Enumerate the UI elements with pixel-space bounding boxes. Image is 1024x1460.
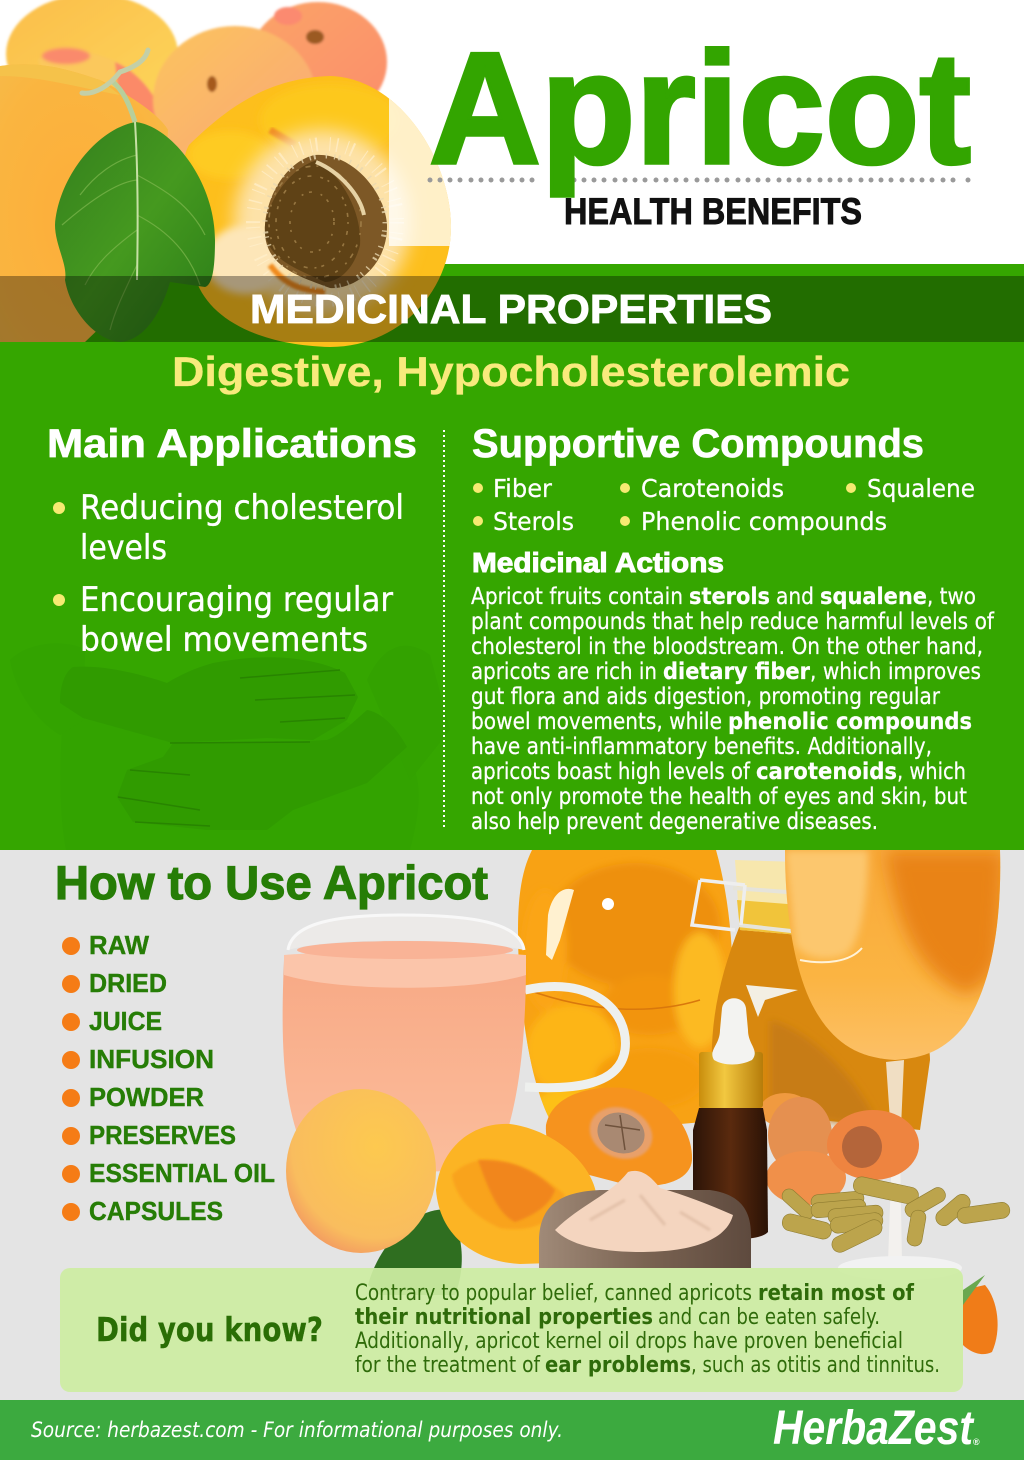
image: leaf beneath whole apricot: [368, 1210, 462, 1295]
text block: medicinal actions: apricots boast high levels of: [471, 759, 751, 785]
vertical dotted divider: [443, 430, 445, 830]
panel: how to use background: [0, 850, 1024, 1400]
image: whole apricot: [286, 1089, 436, 1253]
list: supportive compounds: Squalene: [867, 474, 975, 503]
text block: medicinal actions: , which: [897, 759, 966, 785]
text block: medicinal actions: , two: [927, 584, 976, 610]
list: main applications: Reducing cholesterol: [80, 488, 404, 528]
list: supportive compounds: Carotenoids: [641, 474, 784, 503]
panel: medicinal properties green background: [0, 264, 1024, 850]
image: hands on abdomen silhouette: [10, 643, 450, 850]
list: main applications: levels: [80, 528, 167, 568]
text block: medicinal actions: , which improves: [810, 659, 981, 685]
panel: did you know: [60, 1268, 963, 1392]
list: supportive compounds: Fiber: [493, 474, 553, 503]
list: forms of use: DRIED: [89, 968, 167, 998]
list: forms of use: POWDER: [89, 1082, 204, 1112]
text block: medicinal actions: have anti-inflammatory benefits. Additionally,: [471, 734, 932, 760]
text block: medicinal actions: carotenoids: [756, 759, 897, 785]
dark section band: [0, 276, 1024, 342]
title: Apricot: [429, 19, 971, 197]
text block: did you know: retain most of: [758, 1281, 914, 1306]
text block: medicinal actions: also help prevent degenerative diseases.: [471, 809, 878, 835]
image: glass cup of apricot infusion: [283, 915, 625, 1172]
image: dried apricots: [760, 1093, 919, 1205]
heading: supportive compounds: Supportive Compounds: [472, 422, 924, 466]
text block: medicinal actions: phenolic compounds: [728, 709, 972, 735]
text block: did you know: their nutritional properties: [355, 1305, 653, 1330]
image: jar of preserved apricots: [518, 850, 733, 1135]
list: main applications: [53, 488, 404, 660]
text block: medicinal actions: [471, 584, 995, 835]
text block: medicinal actions: bowel movements, while: [471, 709, 722, 735]
image: jar of apricot jam: [692, 860, 930, 1130]
heading: main applications: Main Applications: [47, 422, 417, 466]
list: forms of use: JUICE: [89, 1006, 162, 1036]
list: forms of use: INFUSION: [89, 1044, 214, 1074]
text block: did you know: , such as otitis and tinnitus.: [691, 1353, 940, 1378]
text block: did you know: for the treatment of: [355, 1353, 541, 1378]
image: bowl of apricot powder: [539, 1171, 751, 1268]
footer bar: [0, 1400, 1024, 1460]
list: forms of use: RAW: [89, 930, 149, 960]
list: forms of use: CAPSULES: [89, 1196, 223, 1226]
heading: medicinal properties: MEDICINAL PROPERTIES: [250, 286, 772, 332]
text block: did you know: Contrary to popular belief, canned apricots: [355, 1281, 752, 1306]
text block: did you know: [355, 1281, 940, 1378]
text block: medicinal actions: apricots are rich in: [471, 659, 657, 685]
image: apricots with leaf: [0, 0, 459, 347]
text block: medicinal actions: squalene: [820, 584, 927, 610]
image: dropper bottle: [693, 998, 768, 1239]
heading: how to use: How to Use Apricot: [55, 856, 488, 909]
list: supportive compounds: Phenolic compounds: [641, 507, 887, 536]
image: halved apricot: [436, 1124, 597, 1264]
dotted divider: [428, 178, 970, 182]
text block: medicinal actions: gut flora and aids digestion, promoting regular: [471, 684, 940, 710]
list: forms of use: ESSENTIAL OIL: [89, 1158, 275, 1188]
heading: did you know: Did you know?: [96, 1310, 323, 1349]
text block: medicinal actions: and: [776, 584, 814, 610]
text block: did you know: and can be eaten safely.: [658, 1305, 880, 1330]
text block: did you know: ear problems: [545, 1353, 691, 1378]
logo: HerbaZest: HerbaZest: [773, 1402, 975, 1455]
footer source text: Source: herbazest.com - For informational purposes only.: [31, 1418, 563, 1442]
image: apricot slice at right: [963, 1275, 998, 1354]
list: main applications: bowel movements: [80, 620, 368, 660]
list: forms of use: [62, 930, 275, 1226]
heading: medicinal actions: Medicinal Actions: [472, 547, 724, 578]
list: supportive compounds: Sterols: [493, 507, 574, 536]
text block: medicinal actions: sterols: [689, 584, 770, 610]
image: halved apricot with pit: [546, 1087, 692, 1186]
list: main applications: Encouraging regular: [80, 580, 393, 620]
list: forms of use: PRESERVES: [89, 1120, 236, 1150]
text block: did you know: Additionally, apricot kernel oil drops have proven beneficial: [355, 1329, 903, 1354]
text block: medicinal actions: dietary fiber: [663, 659, 811, 685]
subheading: properties list: Digestive, Hypocholesterolemic: [172, 348, 850, 395]
image: capsules: [779, 1175, 1011, 1255]
logo: HerbaZest: ®: [973, 1437, 980, 1447]
subtitle: HEALTH BENEFITS: [564, 191, 862, 232]
text block: medicinal actions: Apricot fruits contain: [471, 584, 683, 610]
list: supportive compounds: [473, 474, 975, 536]
image: wine glass of apricot drink: [785, 850, 1005, 1280]
